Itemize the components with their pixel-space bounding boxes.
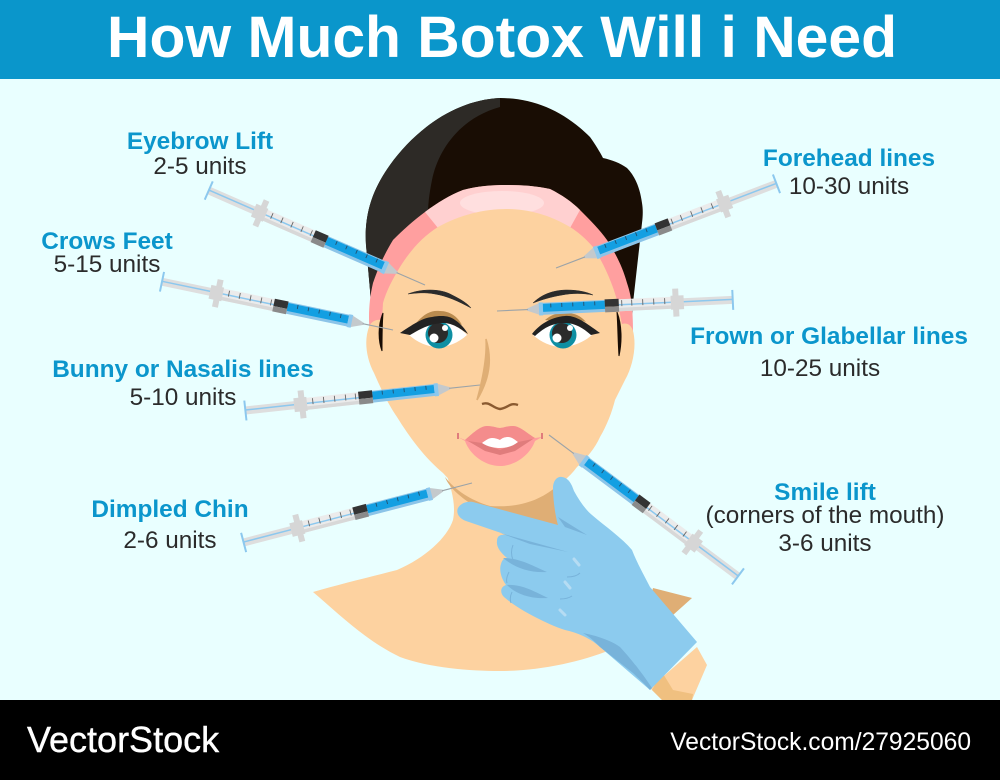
right eye bbox=[532, 313, 600, 348]
wrist bbox=[650, 647, 707, 700]
right eyebrow bbox=[533, 290, 593, 303]
label: dimpled chin: 2-6 units bbox=[123, 527, 217, 554]
lips bbox=[458, 426, 542, 466]
label: bunny lines: 5-10 units bbox=[130, 384, 236, 411]
footer bar bbox=[0, 700, 1000, 780]
label: smile lift: 3-6 units bbox=[778, 530, 872, 557]
label: bunny lines: Bunny or Nasalis lines bbox=[52, 356, 314, 383]
left eye bbox=[400, 311, 468, 348]
syringe: eyebrow lift bbox=[202, 177, 431, 298]
illustration: woman's face bbox=[313, 98, 692, 671]
syringe: bunny lines bbox=[243, 371, 482, 425]
hair bbox=[366, 98, 643, 320]
label: smile lift: (corners of the mouth) bbox=[705, 502, 945, 529]
syringe: forehead lines bbox=[551, 170, 782, 281]
syringe: crows feet bbox=[158, 268, 396, 344]
neck shadow bbox=[445, 477, 562, 530]
label: frown lines: Frown or Glabellar lines bbox=[690, 323, 968, 350]
headband highlight bbox=[460, 191, 544, 215]
knuckle highlights bbox=[560, 559, 579, 615]
label: crows feet: 5-15 units bbox=[54, 251, 160, 278]
label: forehead lines: 10-30 units bbox=[789, 173, 909, 200]
footer bar: VectorStock bbox=[27, 719, 220, 760]
label: crows feet bbox=[41, 228, 173, 278]
nostrils bbox=[482, 403, 518, 409]
label: eyebrow lift: 2-5 units bbox=[153, 153, 247, 180]
label: crows feet: Crows Feet bbox=[41, 228, 173, 255]
glove creases bbox=[500, 517, 587, 598]
left eyebrow bbox=[408, 290, 471, 308]
label: bunny lines bbox=[52, 356, 314, 411]
label: eyebrow lift: Eyebrow Lift bbox=[127, 128, 273, 155]
syringe: smile lift bbox=[541, 424, 747, 588]
label: forehead lines: Forehead lines bbox=[763, 145, 935, 172]
headband bbox=[369, 185, 633, 340]
label: dimpled chin bbox=[91, 496, 249, 554]
label: eyebrow lift bbox=[127, 128, 273, 180]
face bbox=[366, 209, 635, 503]
title banner bbox=[0, 0, 1000, 79]
label: frown lines: 10-25 units bbox=[760, 355, 880, 382]
headband light band bbox=[425, 185, 580, 228]
label: dimpled chin: Dimpled Chin bbox=[91, 496, 249, 523]
side hair strands bbox=[379, 312, 621, 356]
label: forehead lines bbox=[763, 145, 935, 200]
footer bar: VectorStock.com/27925060 bbox=[670, 729, 971, 756]
label: smile lift bbox=[705, 479, 945, 557]
syringe: frown lines bbox=[496, 286, 734, 325]
syringe: dimpled chin bbox=[239, 469, 476, 556]
hair highlight bbox=[366, 98, 500, 320]
title banner: How Much Botox Will i Need bbox=[107, 5, 897, 70]
label: frown lines bbox=[690, 323, 968, 382]
label: smile lift: Smile lift bbox=[774, 479, 876, 506]
nose line bbox=[477, 339, 489, 400]
right shoulder shadow bbox=[640, 588, 692, 640]
neck and shoulders bbox=[313, 470, 640, 671]
hand in blue glove bbox=[457, 477, 697, 690]
